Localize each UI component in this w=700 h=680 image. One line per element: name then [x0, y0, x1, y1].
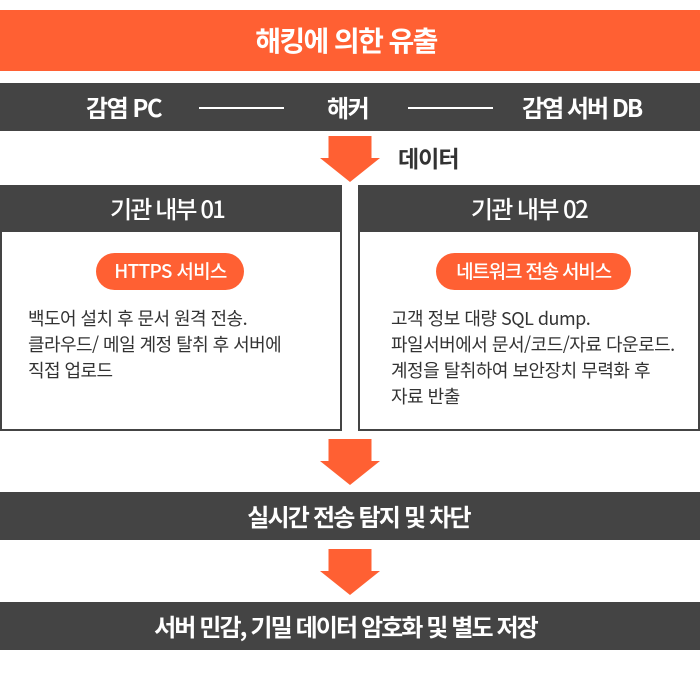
text: internal 02 details: 자료 반출	[391, 383, 460, 409]
pill: HTTPS service	[96, 253, 244, 290]
title text: 해킹에 의한 유출	[255, 20, 437, 60]
panel heading 01: 기관 내부 01	[110, 190, 224, 225]
text: internal 01 details: 직접 업로드	[28, 357, 113, 383]
pill: HTTPS service: HTTPS 서비스	[114, 257, 227, 284]
connector line left	[199, 107, 284, 109]
pill: network transfer service	[436, 253, 631, 290]
label: infected server DB: 감염 서버 DB	[522, 89, 641, 124]
label: infected PC: 감염 PC	[86, 89, 161, 124]
connector line right	[408, 107, 493, 109]
text: internal 01 details: 백도어 설치 후 문서 원격 전송.	[28, 305, 247, 331]
text: internal 02 details: 계정을 탈취하여 보안장치 무력화 후	[391, 357, 650, 383]
panel heading 02: 기관 내부 02	[471, 190, 587, 225]
arrow: data flow	[320, 136, 380, 182]
label: hacker: 해커	[327, 89, 368, 124]
pill: network transfer service: 네트워크 전송 서비스	[456, 257, 611, 284]
bar: real-time detection	[0, 492, 700, 540]
text: internal 02 details: 파일서버에서 문서/코드/자료 다운로드.	[391, 331, 675, 357]
panel header 02	[358, 185, 700, 232]
source bar	[0, 83, 700, 131]
text: internal 02 details: 고객 정보 대량 SQL dump.	[391, 305, 590, 331]
title banner	[0, 10, 700, 71]
panel header 01	[0, 185, 342, 232]
arrow: to encryption	[320, 549, 380, 595]
panel: internal 02	[358, 185, 700, 431]
panel: internal 01	[0, 185, 342, 431]
text: internal 01 details: 클라우드/ 메일 계정 탈취 후 서버에	[28, 331, 281, 357]
text: internal 02 details	[391, 305, 675, 409]
arrow: to detection	[320, 439, 380, 485]
encryption text: 서버 민감, 기밀 데이터 암호화 및 별도 저장	[154, 608, 537, 643]
text: internal 01 details	[28, 305, 281, 383]
bar: encryption	[0, 602, 700, 650]
detection text: 실시간 전송 탐지 및 차단	[247, 498, 470, 533]
label: data: 데이터	[398, 140, 458, 174]
